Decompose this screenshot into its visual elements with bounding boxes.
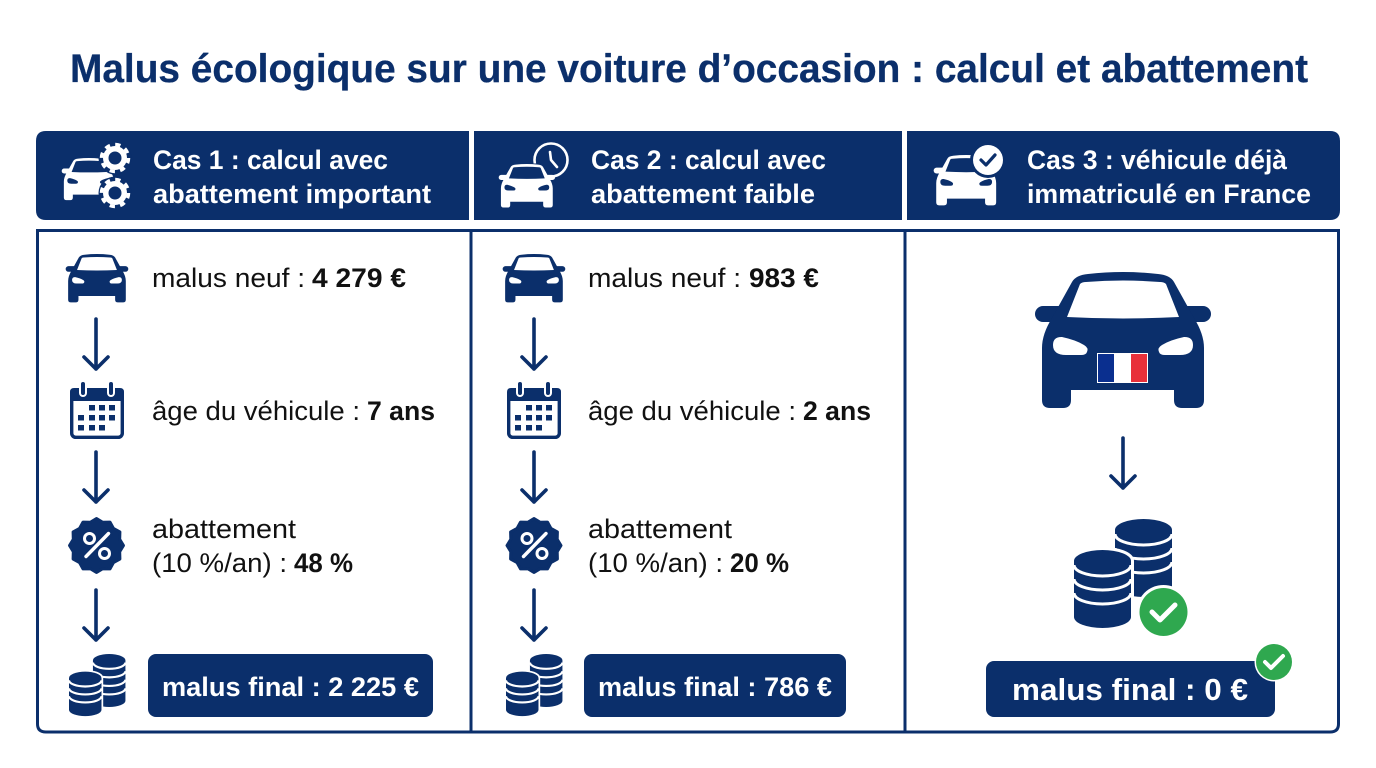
- heading: cas 3: immatriculé en France: [1027, 179, 1311, 209]
- text: abattement: (10 %/an) :: [152, 548, 287, 578]
- icon: car: [503, 254, 565, 302]
- text: malus neuf: 4 279 €: [312, 263, 406, 293]
- callout: malus final cas 1: malus final : 2 225 €: [162, 672, 419, 702]
- arrow: [522, 590, 546, 640]
- text: malus neuf: malus neuf :: [588, 263, 741, 293]
- heading: cas 2: [591, 145, 826, 209]
- arrow: [84, 452, 108, 502]
- callout: malus final cas 2: malus final : 786 €: [598, 672, 832, 702]
- panel: header cas 3: [907, 131, 1340, 220]
- heading: cas 1: abattement important: [153, 179, 431, 209]
- icon: coins: [69, 654, 125, 716]
- heading: cas 3: Cas 3 : véhicule déjà: [1027, 145, 1288, 175]
- callout: malus final cas 3: [986, 642, 1294, 717]
- text: age: âge du véhicule :: [588, 396, 796, 426]
- text: malus neuf: 983 €: [749, 263, 819, 293]
- icon: percent badge: [507, 518, 561, 572]
- text: malus neuf: malus neuf :: [152, 263, 305, 293]
- icon: coins with check: [1074, 519, 1190, 639]
- text: abattement: abattement: [588, 514, 733, 544]
- heading: cas 2: Cas 2 : calcul avec: [591, 145, 826, 175]
- text: abattement: 20 %: [730, 548, 789, 578]
- text: abattement: [152, 514, 353, 578]
- heading: cas 1: [153, 145, 431, 209]
- arrow: [84, 590, 108, 640]
- icon: coins: [506, 654, 562, 716]
- icon: calendar: [507, 384, 561, 437]
- icon: percent badge: [70, 518, 124, 572]
- arrow: [84, 319, 108, 369]
- heading: cas 2: abattement faible: [591, 179, 815, 209]
- text: abattement: (10 %/an) :: [588, 548, 723, 578]
- text: malus neuf: [588, 263, 819, 293]
- panel: header cas 1: [36, 131, 469, 220]
- callout: malus final cas 1: [148, 654, 433, 717]
- panel: cas 3 content: [986, 272, 1294, 717]
- text: abattement: abattement: [152, 514, 297, 544]
- icon: large car with French flag: [1035, 272, 1211, 408]
- icon: car with check: [934, 142, 1006, 205]
- text: age: 2 ans: [803, 396, 871, 426]
- text: malus neuf: [152, 263, 406, 293]
- title: Malus écologique sur une voiture d’occasion : calcul et abattement: [70, 47, 1308, 91]
- text: abattement: [588, 514, 789, 578]
- icon: French flag: [1097, 353, 1148, 383]
- icon: car: [66, 254, 128, 302]
- arrow: [1111, 438, 1135, 488]
- icon: car with clock: [498, 144, 568, 210]
- panel: header cas 2: [474, 131, 902, 220]
- icon: car with gears: [62, 142, 131, 210]
- icon: green check badge: [1254, 642, 1294, 682]
- text: age: 7 ans: [367, 396, 435, 426]
- text: abattement: 48 %: [294, 548, 353, 578]
- icon: calendar: [70, 384, 124, 437]
- callout: malus final cas 2: [584, 654, 846, 717]
- arrow: [522, 319, 546, 369]
- callout: malus final cas 3: malus final : 0 €: [1012, 672, 1248, 707]
- panel: body frame: [38, 230, 1338, 732]
- heading: cas 3: [1027, 145, 1311, 209]
- arrow: [522, 452, 546, 502]
- text: age: âge du véhicule :: [152, 396, 360, 426]
- panel: cas 1 content: [66, 254, 435, 717]
- panel: cas 2 content: [503, 254, 871, 717]
- heading: cas 1: Cas 1 : calcul avec: [153, 145, 388, 175]
